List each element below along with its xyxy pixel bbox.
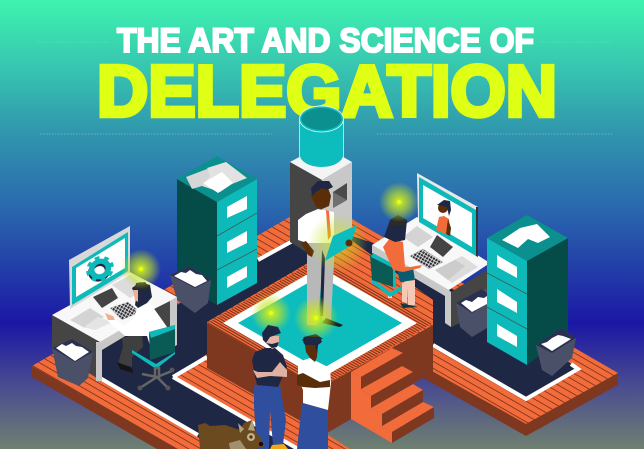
left desk <box>52 272 177 381</box>
left computer monitor <box>69 226 130 309</box>
dog <box>198 420 263 449</box>
raised pedestal <box>207 258 433 437</box>
right desk <box>372 217 490 327</box>
right office chair <box>370 253 414 298</box>
heading line: the art and science of: THE ART AND SCIENCE OF <box>117 22 534 60</box>
paper bin right <box>536 328 576 376</box>
clipboard <box>325 225 357 261</box>
platform: wooden base <box>32 200 618 449</box>
right computer monitor <box>417 173 478 257</box>
filing cabinet left <box>177 156 257 305</box>
heading line: delegation: DELEGATION <box>97 52 557 132</box>
bearded man <box>252 325 288 449</box>
stairs <box>351 348 434 443</box>
paper bin front left <box>52 339 93 386</box>
glow: clipboard <box>308 213 368 273</box>
carpet left <box>95 234 330 449</box>
person at left desk <box>105 282 167 373</box>
left office chair <box>132 325 175 390</box>
left keyboard <box>110 302 140 320</box>
carpet right <box>340 232 578 398</box>
right keyboard <box>410 249 443 269</box>
glow: left desk <box>121 249 161 289</box>
manager standing on pedestal <box>298 181 343 341</box>
woman at right desk <box>383 215 422 308</box>
dotted rules <box>38 42 612 134</box>
paper bin under right desk <box>456 289 487 337</box>
filing cabinet right <box>487 215 568 365</box>
glow: standing manager <box>294 296 338 340</box>
papers on left desk <box>70 308 104 328</box>
papers on right desk <box>403 226 433 247</box>
title <box>97 22 557 132</box>
server block and water cylinder <box>290 106 352 262</box>
glow: pedestal corner <box>251 293 291 333</box>
gear icon <box>84 253 116 285</box>
glow: right desk <box>379 182 419 222</box>
paper bin beside left cabinet <box>170 266 211 313</box>
video call woman <box>436 200 451 236</box>
man in white shirt <box>297 337 331 449</box>
